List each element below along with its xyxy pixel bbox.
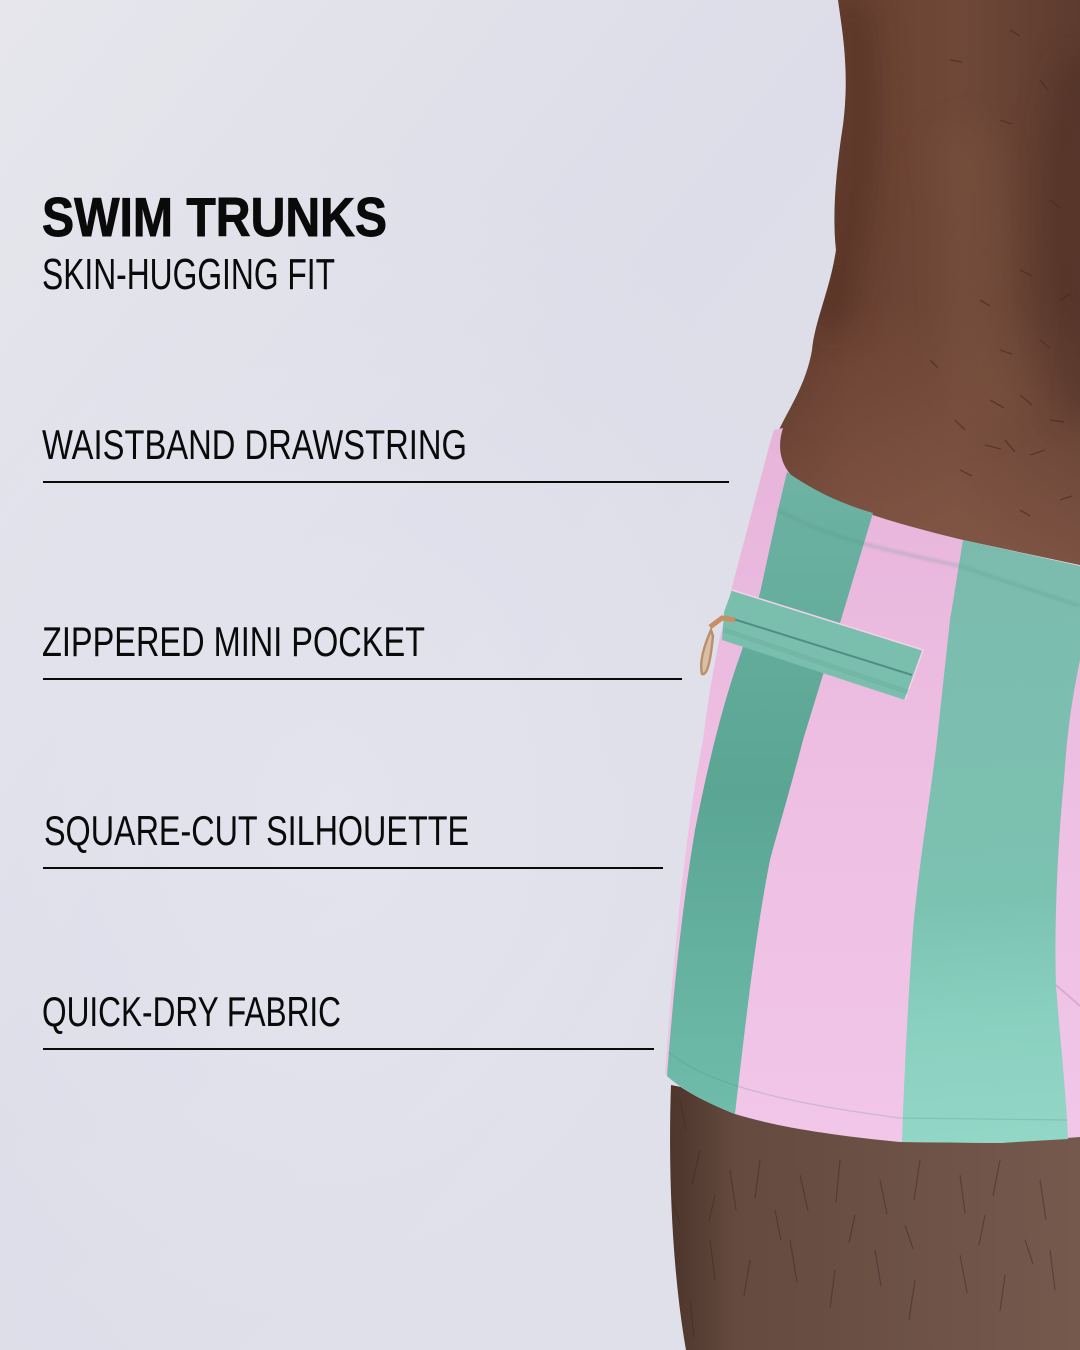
- trunks green stripe right: [902, 540, 1080, 1143]
- callout: zippered mini pocket: ZIPPERED MINI POCKET: [42, 618, 425, 665]
- swim trunks: [665, 428, 1080, 1143]
- zipper pull: [701, 618, 735, 674]
- model leg: [660, 1080, 1080, 1350]
- trunks pink base: [665, 428, 1080, 1143]
- title: SWIM TRUNKS: [42, 186, 387, 248]
- crease: [1056, 985, 1080, 1006]
- callout: waistband drawstring: WAISTBAND DRAWSTRING: [42, 421, 467, 468]
- zipper pocket: [722, 590, 923, 700]
- model torso: [770, 0, 1080, 570]
- subtitle: SKIN-HUGGING FIT: [42, 250, 335, 299]
- waistband stitching: [778, 510, 1080, 606]
- callout: square-cut silhouette: SQUARE-CUT SILHOUETTE: [44, 807, 469, 854]
- hem stitching: [668, 1052, 1068, 1120]
- callout: quick-dry fabric: QUICK-DRY FABRIC: [42, 988, 341, 1035]
- trunks green stripe left: [667, 472, 873, 1114]
